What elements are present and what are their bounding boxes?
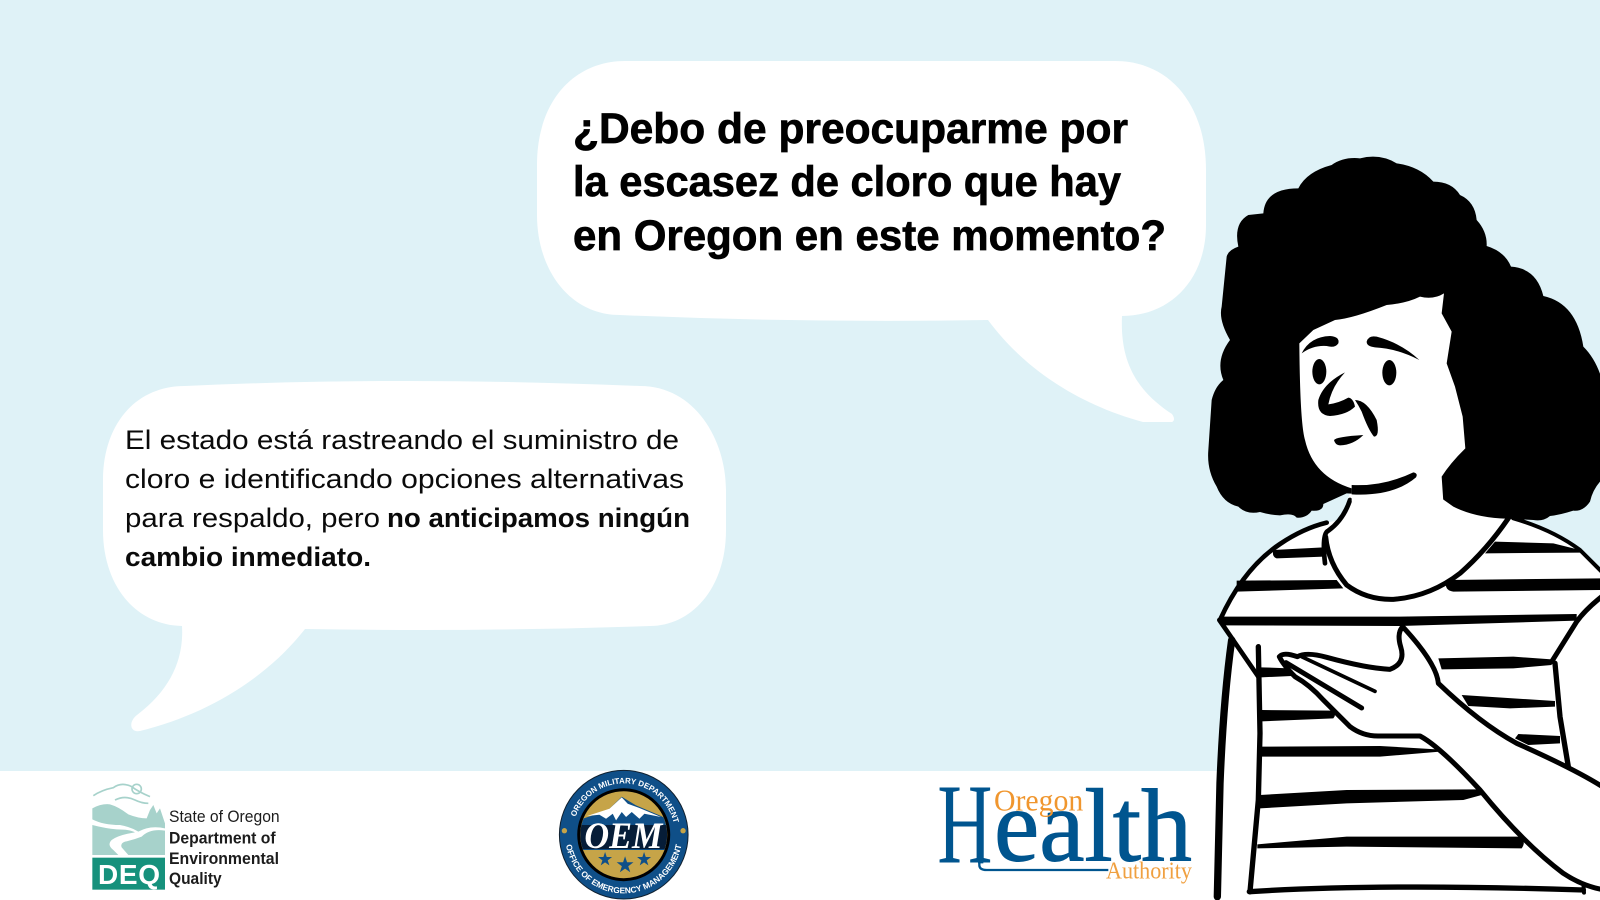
seal ring text: OFFICE OF EMERGENCY MANAGEMENT (566, 844, 682, 894)
answer text: para respaldo, pero (125, 503, 380, 533)
answer text: cloro e identificando opciones alternativas (125, 464, 684, 494)
seal ring text (566, 778, 682, 894)
question heading (573, 105, 1166, 260)
answer text (125, 425, 690, 572)
illustration: worried woman (1208, 157, 1600, 900)
question heading: ¿Debo de preocuparme por (573, 105, 1128, 153)
question heading: en Oregon en este momento? (573, 212, 1166, 260)
DEQ wordmark (169, 807, 280, 888)
seal initials: OEM (584, 815, 664, 856)
seal ring text: OREGON MILITARY DEPARTMENT (571, 778, 680, 822)
DEQ wordmark: Quality (169, 869, 222, 888)
logo: Oregon Health Authority: H (937, 760, 992, 887)
hand (1279, 627, 1600, 890)
DEQ landscape (92, 784, 165, 855)
question heading: la escasez de cloro que hay (573, 158, 1121, 206)
DEQ wordmark: Department of (169, 828, 276, 847)
finger lines (1286, 657, 1375, 708)
DEQ wordmark: Environmental (169, 849, 279, 868)
shirt stripes (1220, 542, 1600, 848)
logo: Oregon Health Authority: ealth (994, 768, 1192, 884)
footer band (0, 771, 1600, 900)
logo: Oregon Office of Emergency Management seal (558, 770, 689, 900)
speech bubble: answer (103, 381, 726, 731)
face (1299, 293, 1465, 502)
seal stars (598, 852, 651, 872)
logo: Oregon DEQ (92, 784, 280, 890)
speech bubble: question (537, 61, 1206, 422)
answer text: cambio inmediato. (125, 542, 371, 572)
answer text: no anticipamos ningún (387, 503, 690, 533)
logo: Oregon DEQ: DEQ (98, 859, 160, 890)
logo: Oregon Health Authority: Authority (1106, 857, 1193, 884)
DEQ badge (92, 858, 165, 890)
DEQ wordmark: State of Oregon (169, 807, 280, 826)
hair (1208, 157, 1600, 520)
logo: Oregon Health Authority: Oregon (994, 784, 1083, 818)
shirt and arm (1217, 493, 1600, 900)
answer text: El estado está rastreando el suministro de (125, 425, 679, 455)
